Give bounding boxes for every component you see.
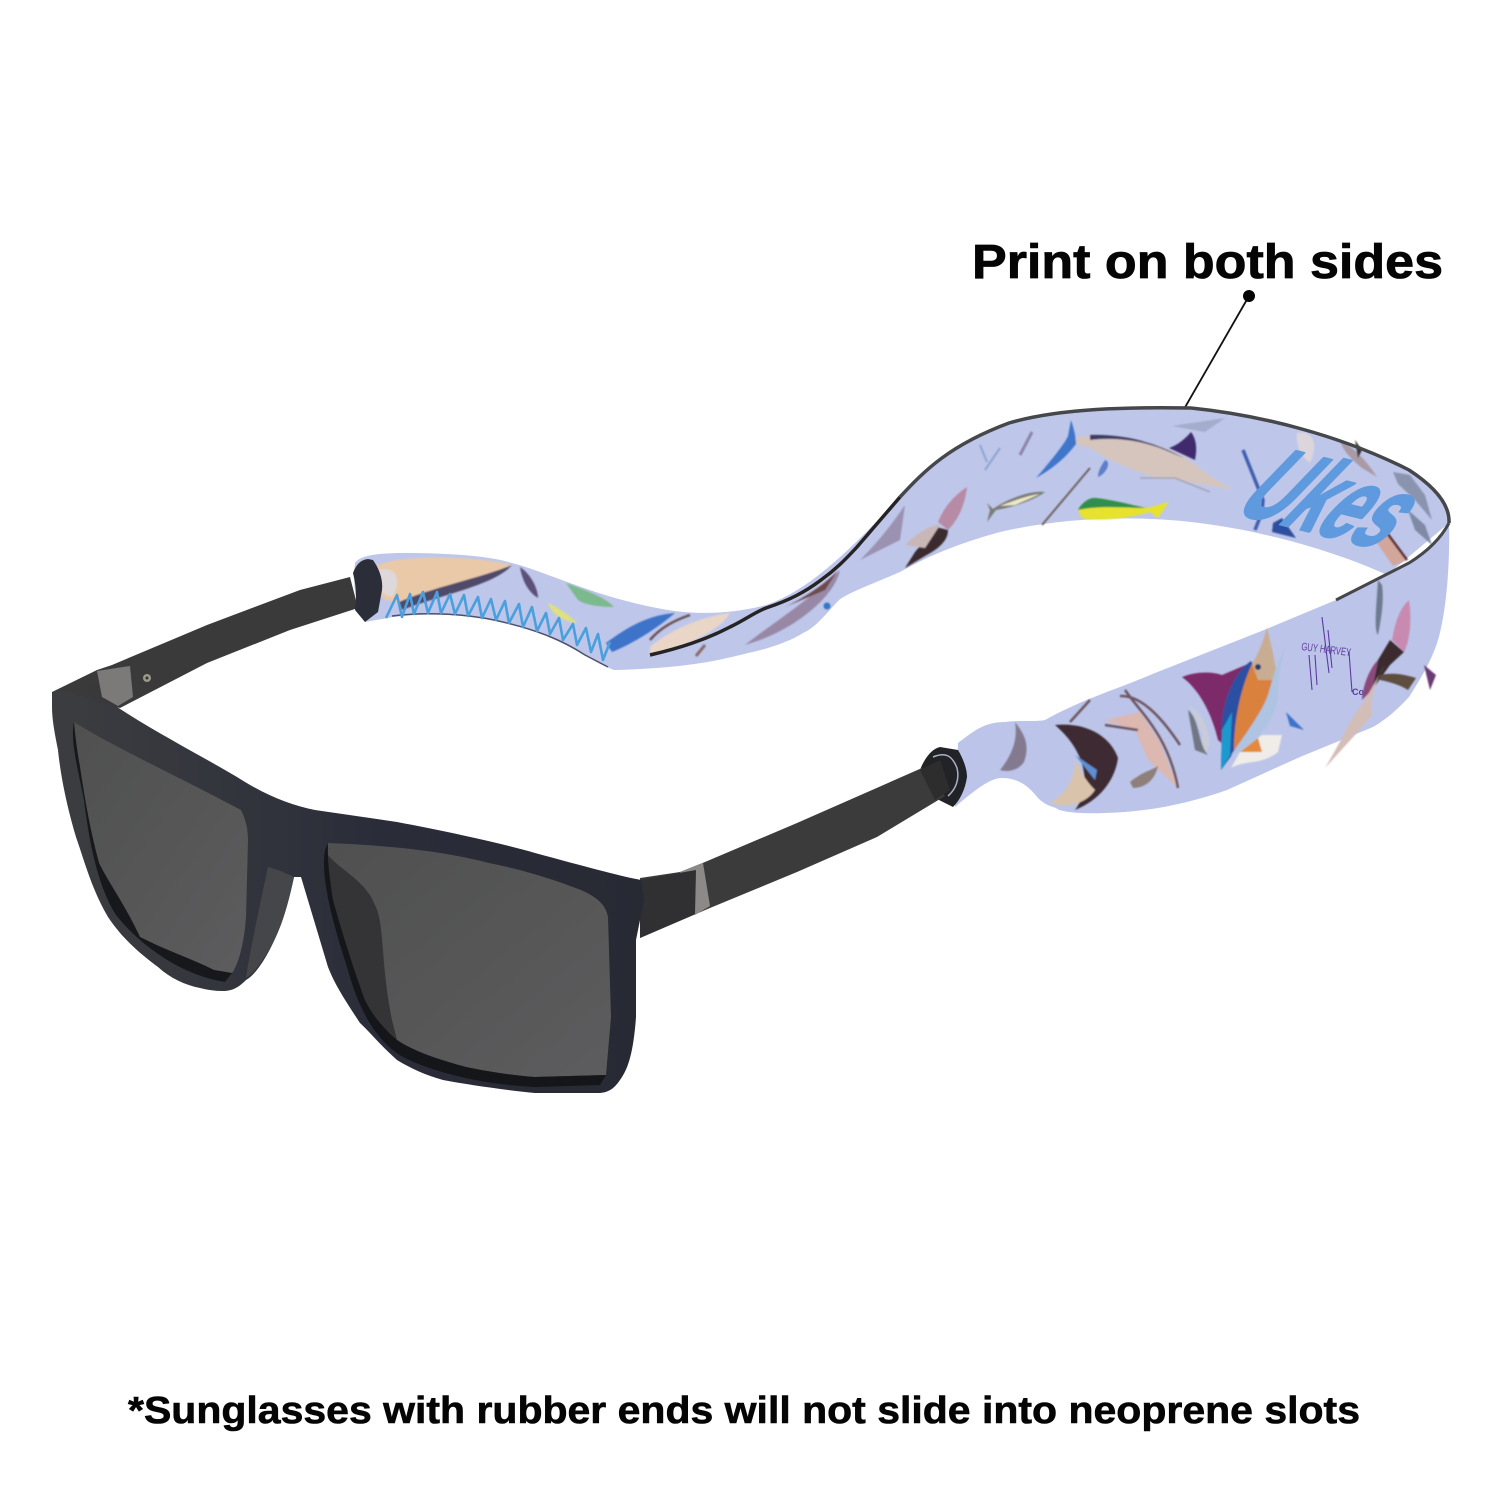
callout heading: print on both sides: Print on both sides — [972, 236, 1443, 289]
sunglasses front frame — [52, 690, 644, 1093]
callout leader line with dot — [1176, 290, 1255, 423]
right lens — [328, 843, 611, 1077]
near temple arm of sunglasses — [640, 760, 950, 938]
left strap lower dark seam — [392, 614, 608, 667]
lower-left marlin print — [1000, 690, 1208, 810]
left strap print: green and yellow fish — [548, 583, 614, 623]
interior print: dorado fish — [1078, 498, 1169, 520]
left strap print: tan billfish — [375, 558, 538, 610]
left strap print: far fish marks — [696, 505, 905, 656]
interior print: small tuna — [987, 492, 1045, 522]
strap: interior back surface with fish print — [900, 408, 1449, 575]
footnote: *Sunglasses with rubber ends will not slide into neoprene slots — [128, 1390, 1360, 1432]
interior print: sailfish left and sword — [905, 432, 1090, 568]
right sailfish print — [1325, 580, 1436, 768]
near-edge dark seam — [1336, 523, 1449, 600]
strap dark top edge — [900, 408, 1449, 523]
main marlin print — [1182, 628, 1304, 770]
interior print: right side fish and dark blue marks — [1172, 418, 1432, 566]
left lens — [74, 722, 248, 973]
Guy Harvey signature: GUY HARVEY — [1301, 641, 1352, 659]
strap: left section — [353, 497, 905, 670]
left strap blue zigzag stitching — [386, 592, 610, 660]
right lens dark rim — [324, 843, 606, 1087]
near temple end covered by strap rim — [920, 760, 950, 800]
collar opening — [920, 747, 967, 807]
left strap collar opening — [353, 559, 382, 622]
nose bridge highlight — [246, 867, 294, 978]
left strap print: blue and tan fish — [606, 613, 730, 655]
Guy Harvey signature — [1301, 617, 1364, 697]
left lens dark rim — [73, 722, 232, 982]
far temple arm of sunglasses — [52, 577, 358, 708]
Guy Harvey signature: Co — [1352, 687, 1364, 697]
interior print: blue marlin — [1036, 420, 1235, 492]
strap: outer front section with fish print — [920, 523, 1449, 813]
right lens inner reflection — [328, 855, 397, 1040]
left strap fold line — [650, 497, 900, 655]
